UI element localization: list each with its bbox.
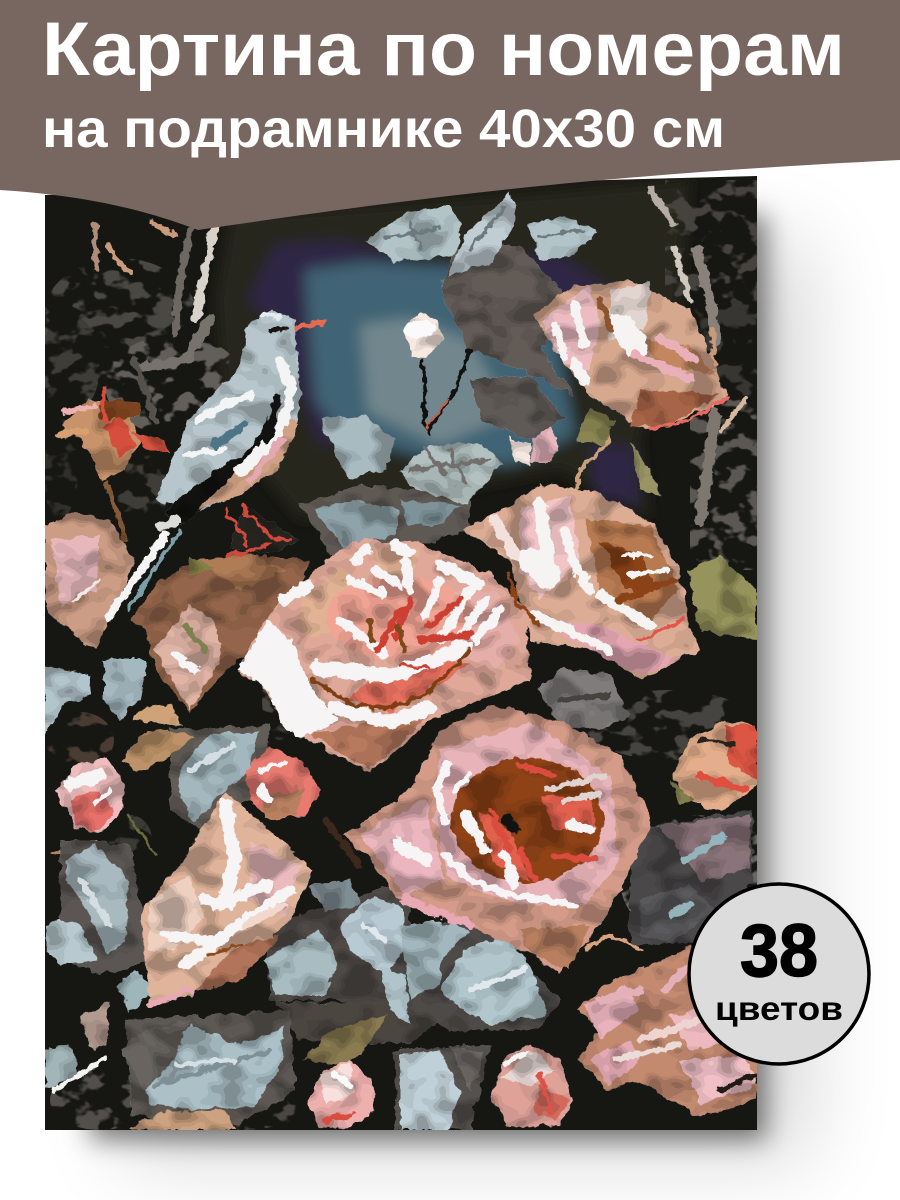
right lower leaves xyxy=(400,408,757,1130)
rose highlights: buds xyxy=(70,328,745,1120)
canvas drop shadow xyxy=(90,215,810,1160)
thin branches and pale stems xyxy=(50,190,745,865)
bird xyxy=(155,310,300,555)
badge number: 38 xyxy=(740,909,818,992)
mottled painted forms xyxy=(45,192,757,1130)
grey mottled dark foliage xyxy=(40,180,780,1130)
banner xyxy=(0,0,900,230)
shadowed grey foliage behind leaves xyxy=(60,245,752,1130)
small buds upper xyxy=(403,313,560,465)
red flower near bird xyxy=(62,400,170,540)
rose: bottom centre xyxy=(345,705,652,972)
rose highlights: bottom centre xyxy=(400,765,605,925)
badge: 38 colours xyxy=(689,884,869,1064)
rose: lower left xyxy=(142,793,312,1007)
rose: middle right xyxy=(463,485,700,680)
badge label: цветов xyxy=(715,990,843,1027)
rose buds xyxy=(55,720,757,1128)
rose: left edge xyxy=(45,512,135,650)
foliage cluster under bird xyxy=(130,555,310,712)
rose: centre large xyxy=(237,540,530,773)
left lower leaves xyxy=(45,660,410,1130)
rose: upper right xyxy=(533,280,727,430)
heading: subtitle: на подрамнике 40х30 см xyxy=(42,99,725,159)
rose: lower right xyxy=(577,947,757,1118)
rose highlights: upper right xyxy=(555,300,727,428)
painting background colour fields xyxy=(215,178,690,520)
rose highlights: lower left xyxy=(150,805,290,1005)
painting: bird and roses canvas xyxy=(40,170,780,1135)
red flower accents xyxy=(60,390,105,435)
upper blue-grey leaves xyxy=(315,192,597,548)
bird details xyxy=(108,315,322,618)
crisp highlights and dark accents xyxy=(55,208,755,1120)
bud stems xyxy=(423,350,470,432)
rose highlights: centre large xyxy=(237,545,500,738)
heading: title: Картина по номерам xyxy=(42,7,845,92)
rose highlights: middle right xyxy=(495,505,682,650)
rose highlights: lower right xyxy=(585,935,755,1090)
leaf veins xyxy=(55,208,725,1090)
